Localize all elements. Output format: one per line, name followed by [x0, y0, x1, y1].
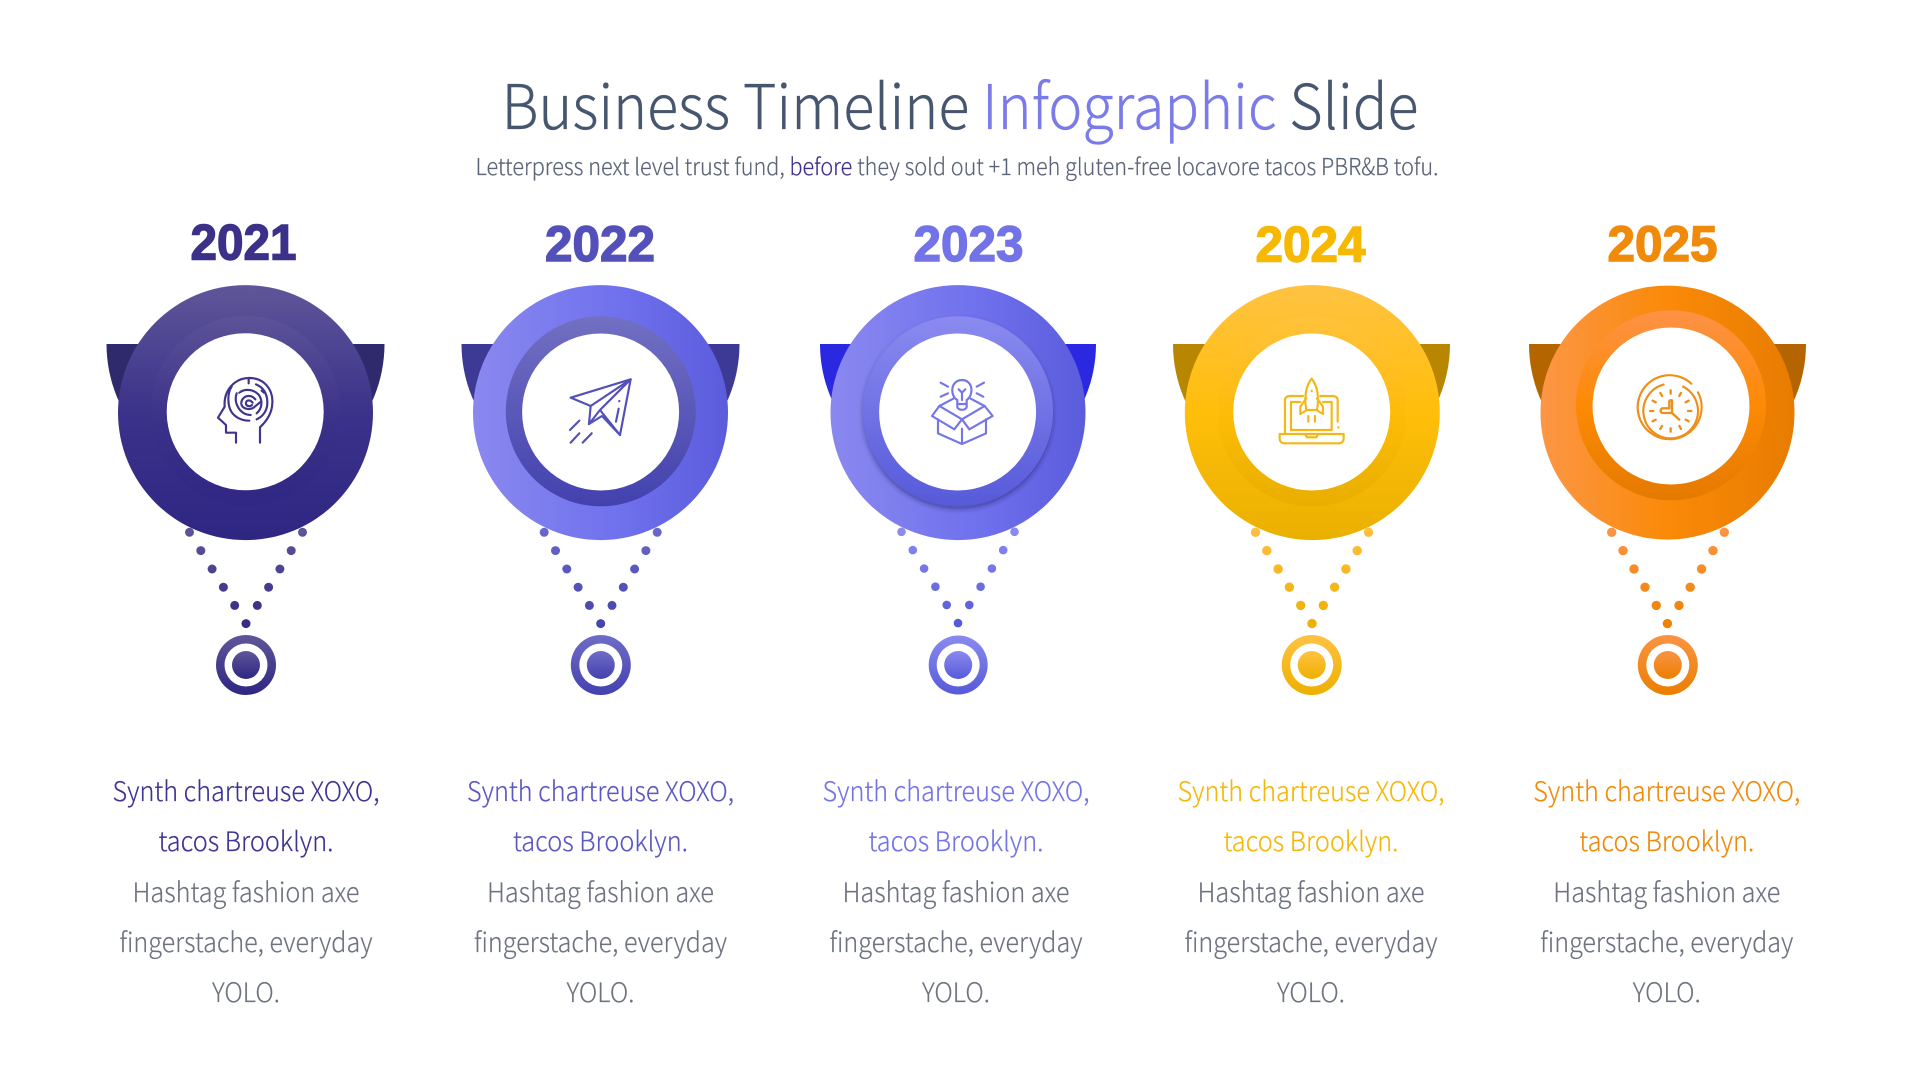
description 2023: [822, 770, 1090, 1010]
icon: light bulb in box: [932, 380, 993, 444]
year 2024: 2024: [1256, 216, 1366, 272]
icon: rocket launching from laptop: [1280, 379, 1344, 443]
target marker 2022: [571, 635, 631, 695]
description 2021: Synth chartreuse XOXO,: [112, 770, 380, 809]
description 2025: YOLO.: [1633, 971, 1701, 1010]
description 2023: Hashtag fashion axe: [842, 871, 1070, 910]
icon: head with maze: [218, 378, 272, 443]
panel: 2023: [820, 216, 1096, 1010]
medallion 2023: [820, 285, 1096, 540]
icon: clock: [1633, 374, 1708, 448]
panel: 2021: [106, 214, 385, 1010]
description 2022: Synth chartreuse XOXO,: [467, 770, 734, 809]
title: Business Timeline Infographic Slide: [502, 57, 1418, 147]
description 2024: [1178, 770, 1444, 1010]
description 2025: [1533, 770, 1800, 1010]
description 2023: YOLO.: [922, 971, 990, 1010]
description 2022: [467, 770, 734, 1010]
description 2025: Synth chartreuse XOXO,: [1533, 770, 1800, 809]
description 2024: fingerstache, everyday: [1184, 921, 1438, 960]
panel: 2024: [1173, 216, 1450, 1010]
panel: 2025: [1529, 216, 1806, 1010]
description 2024: YOLO.: [1277, 971, 1345, 1010]
description 2021: [112, 770, 380, 1010]
description 2022: tacos Brooklyn.: [513, 820, 688, 859]
connector dots 2022: [540, 528, 662, 628]
description 2023: Synth chartreuse XOXO,: [822, 770, 1090, 809]
description 2025: fingerstache, everyday: [1540, 921, 1793, 960]
medallion 2022: [462, 285, 740, 540]
year 2022: 2022: [545, 216, 655, 272]
medallion 2024: [1173, 285, 1450, 540]
description 2023: fingerstache, everyday: [830, 921, 1082, 960]
year 2021: 2021: [190, 214, 296, 270]
target marker 2021: [216, 635, 276, 695]
subtitle: Letterpress next level trust fund, before they sold out +1 meh gluten-free locavore tacos PBR&B tofu.: [476, 148, 1438, 182]
connector dots 2024: [1251, 528, 1373, 628]
connector dots 2023: [897, 528, 1019, 627]
description 2024: tacos Brooklyn.: [1224, 820, 1398, 859]
connector dots 2021: [185, 528, 307, 628]
connector dots 2025: [1607, 528, 1729, 628]
description 2022: YOLO.: [566, 971, 634, 1010]
description 2021: Hashtag fashion axe: [132, 871, 360, 910]
panel: 2022: [462, 216, 740, 1010]
medallion 2025: [1529, 286, 1806, 540]
target marker 2023: [929, 636, 988, 694]
medallion 2021: [106, 285, 385, 540]
description 2025: tacos Brooklyn.: [1579, 820, 1754, 859]
description 2025: Hashtag fashion axe: [1553, 871, 1780, 910]
description 2021: tacos Brooklyn.: [158, 820, 334, 859]
description 2023: tacos Brooklyn.: [868, 820, 1044, 859]
target marker 2024: [1282, 635, 1342, 695]
description 2022: fingerstache, everyday: [474, 921, 727, 960]
description 2021: YOLO.: [212, 971, 280, 1010]
description 2024: Synth chartreuse XOXO,: [1178, 770, 1444, 809]
target marker 2025: [1638, 635, 1698, 695]
description 2022: Hashtag fashion axe: [487, 871, 714, 910]
description 2024: Hashtag fashion axe: [1198, 871, 1424, 910]
description 2021: fingerstache, everyday: [120, 921, 372, 960]
year 2025: 2025: [1608, 216, 1718, 272]
icon: paper plane: [570, 379, 631, 443]
year 2023: 2023: [914, 216, 1024, 272]
